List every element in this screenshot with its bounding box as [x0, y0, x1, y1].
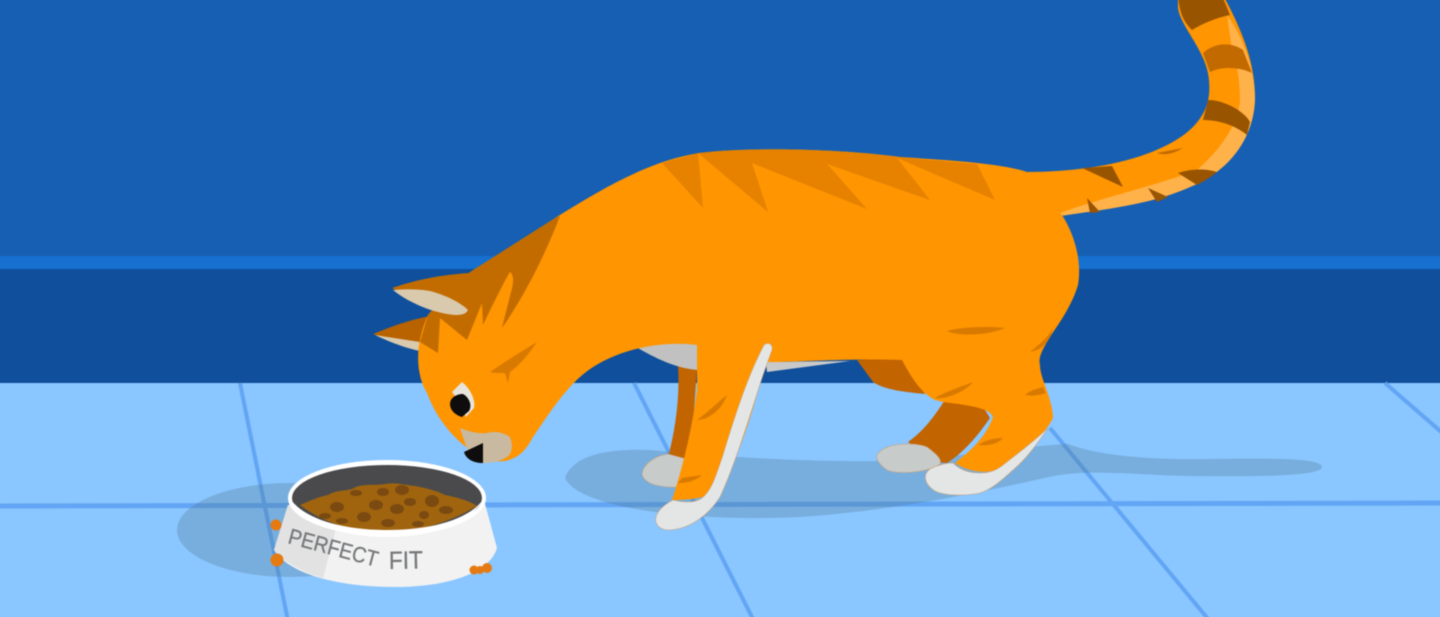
tail	[1026, 0, 1255, 216]
bowl rim	[288, 460, 486, 536]
bowl interior	[292, 465, 482, 531]
spilled kibble	[270, 520, 492, 574]
back stripes	[662, 153, 703, 208]
head dark fur	[420, 216, 560, 353]
back far leg	[642, 366, 697, 487]
bowl base	[274, 500, 497, 587]
bowl	[270, 460, 497, 587]
skirting board	[0, 256, 1440, 383]
back stripe band	[698, 149, 995, 212]
near ear	[392, 273, 470, 315]
bowl shaded side	[274, 505, 337, 578]
bowl label: PERFECT	[286, 524, 381, 572]
front paw white fur	[656, 343, 772, 530]
kibble pile	[300, 483, 477, 532]
bowl shadow	[177, 483, 403, 577]
muzzle	[460, 428, 512, 463]
tail highlight	[1060, 15, 1255, 216]
hind far leg	[877, 400, 990, 472]
far ear	[373, 316, 430, 352]
bowl front rim	[289, 497, 485, 537]
wall	[0, 0, 1440, 257]
bowl label second word: FIT	[389, 546, 423, 575]
cat	[373, 0, 1255, 530]
tiled floor	[0, 383, 1440, 617]
belly fur	[636, 342, 925, 394]
cat shadow	[565, 444, 1322, 518]
hind paw white fur	[925, 428, 1048, 495]
eye	[450, 382, 474, 417]
body and head	[418, 149, 1079, 500]
fur marks	[490, 327, 1053, 483]
